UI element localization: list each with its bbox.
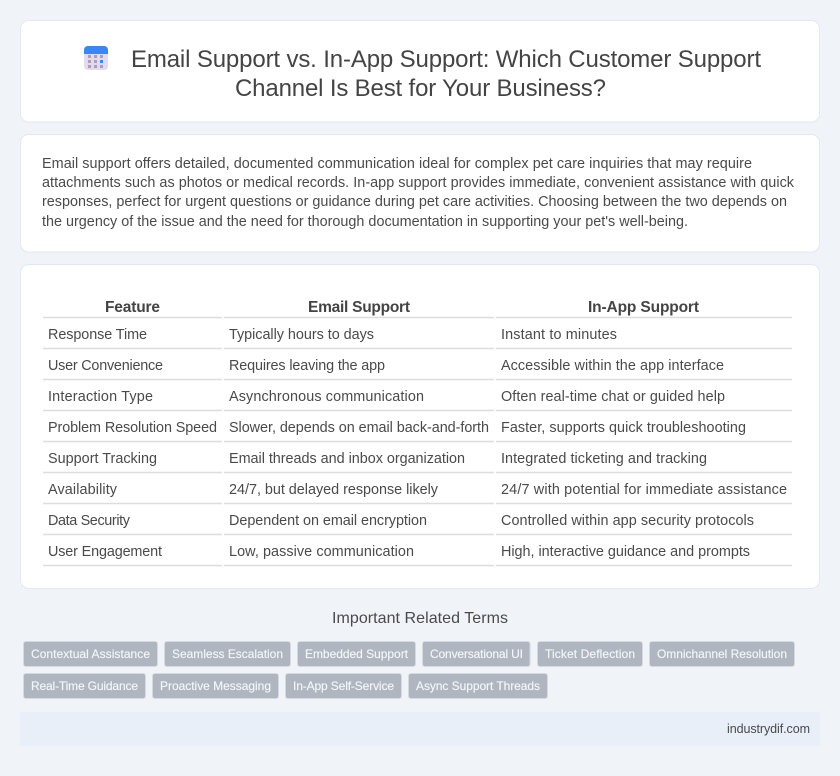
table row: Availability: 24/7, but delayed response likely bbox=[229, 482, 439, 498]
table row: Problem Resolution Speed bbox=[48, 420, 746, 436]
table row: User Convenience: User Convenience bbox=[48, 358, 163, 374]
tag: Omnichannel Resolution bbox=[650, 642, 794, 666]
tag: Seamless Escalation: Seamless Escalation bbox=[172, 647, 283, 661]
text block: intro paragraph: Email support offers detailed, documented communication ideal for complex pet care inquiries that may require bbox=[42, 156, 752, 172]
title: Channel Is Best for Your Business? bbox=[235, 75, 606, 102]
table row: Problem Resolution Speed: Slower, depends on email back-and-forth bbox=[229, 420, 489, 436]
tag: Conversational UI bbox=[422, 642, 530, 666]
icon: calendar bbox=[84, 46, 108, 70]
table row: Response Time: Typically hours to days bbox=[229, 327, 374, 343]
title bbox=[131, 46, 761, 102]
table row: Response Time: Response Time bbox=[48, 327, 147, 343]
table row: Support Tracking bbox=[48, 451, 707, 467]
table header: In-App Support bbox=[588, 299, 699, 316]
table row: User Convenience bbox=[48, 358, 724, 374]
table row: User Convenience: Accessible within the app interface bbox=[501, 358, 724, 374]
table row: Availability: Availability bbox=[48, 482, 118, 498]
tag: Embedded Support: Embedded Support bbox=[305, 647, 409, 661]
table row: Problem Resolution Speed: Problem Resolution Speed bbox=[48, 420, 217, 436]
tag: Proactive Messaging: Proactive Messaging bbox=[160, 679, 271, 693]
table row: Data Security: Dependent on email encryption bbox=[229, 513, 427, 529]
table row: Response Time: Instant to minutes bbox=[501, 327, 617, 343]
table row: Interaction Type: Asynchronous communication bbox=[229, 389, 424, 405]
table row: Support Tracking: Email threads and inbox organization bbox=[229, 451, 465, 467]
footer bbox=[20, 712, 820, 746]
text block: intro paragraph: responses, perfect for urgent questions or guidance during pet care activities. Choosing between the two depends on bbox=[42, 194, 787, 210]
panel: comparison table bbox=[20, 264, 820, 588]
text block: intro paragraph: the urgency of the issue and the need for thorough documentation in supporting your pet's well-being. bbox=[42, 214, 688, 230]
tag: Real-Time Guidance bbox=[24, 674, 146, 698]
tag: Embedded Support bbox=[298, 642, 416, 666]
table row: User Convenience: Requires leaving the app bbox=[229, 358, 385, 374]
tag: Contextual Assistance bbox=[24, 642, 158, 666]
tag: Conversational UI: Conversational UI bbox=[430, 647, 523, 661]
tag group: related terms bbox=[24, 642, 794, 698]
panel: title card bbox=[20, 20, 820, 122]
tag: Ticket Deflection bbox=[538, 642, 642, 666]
table row: User Engagement: User Engagement bbox=[48, 544, 162, 560]
table row: Interaction Type: Interaction Type bbox=[48, 389, 153, 405]
tag: Async Support Threads: Async Support Threads bbox=[416, 679, 540, 693]
table row: Support Tracking: Integrated ticketing and tracking bbox=[501, 451, 707, 467]
tag: In-App Self-Service: In-App Self-Service bbox=[293, 679, 394, 693]
table row: Availability bbox=[48, 482, 787, 498]
tag: Proactive Messaging bbox=[152, 674, 278, 698]
tag: Contextual Assistance: Contextual Assistance bbox=[31, 647, 150, 661]
tag: Real-Time Guidance: Real-Time Guidance bbox=[31, 679, 138, 693]
tag: Ticket Deflection: Ticket Deflection bbox=[545, 647, 635, 661]
panel: intro text bbox=[20, 134, 820, 252]
table row: Problem Resolution Speed: Faster, supports quick troubleshooting bbox=[501, 420, 746, 436]
tag: In-App Self-Service bbox=[286, 674, 402, 698]
table row: User Engagement: Low, passive communication bbox=[229, 544, 414, 560]
footer: industrydif.com bbox=[727, 722, 810, 736]
text block: intro paragraph bbox=[42, 156, 795, 230]
heading: important related terms: Important Related Terms bbox=[332, 610, 508, 627]
tag: Async Support Threads bbox=[408, 674, 548, 698]
title: Email Support vs. In-App Support: Which Customer Support bbox=[131, 46, 761, 73]
table row: Interaction Type bbox=[48, 389, 725, 405]
table header bbox=[105, 299, 699, 316]
table row: Data Security: Controlled within app security protocols bbox=[501, 513, 754, 529]
table row: Data Security bbox=[48, 513, 754, 529]
table row: Availability: 24/7 with potential for immediate assistance bbox=[501, 482, 787, 498]
tag: Omnichannel Resolution: Omnichannel Resolution bbox=[657, 647, 787, 661]
table row: Response Time bbox=[48, 327, 617, 343]
text block: intro paragraph: attachments such as photos or medical records. In-app support provides immediate, convenient assistance with quick bbox=[42, 175, 795, 191]
table row: Support Tracking: Support Tracking bbox=[48, 451, 157, 467]
table header: Email Support bbox=[308, 299, 410, 316]
table row: Interaction Type: Often real-time chat or guided help bbox=[501, 389, 725, 405]
table row: User Engagement: High, interactive guidance and prompts bbox=[501, 544, 750, 560]
table row: Data Security: Data Security bbox=[48, 513, 131, 529]
table row: User Engagement bbox=[48, 544, 750, 560]
table header: Feature bbox=[105, 299, 160, 316]
tag: Seamless Escalation bbox=[164, 642, 290, 666]
